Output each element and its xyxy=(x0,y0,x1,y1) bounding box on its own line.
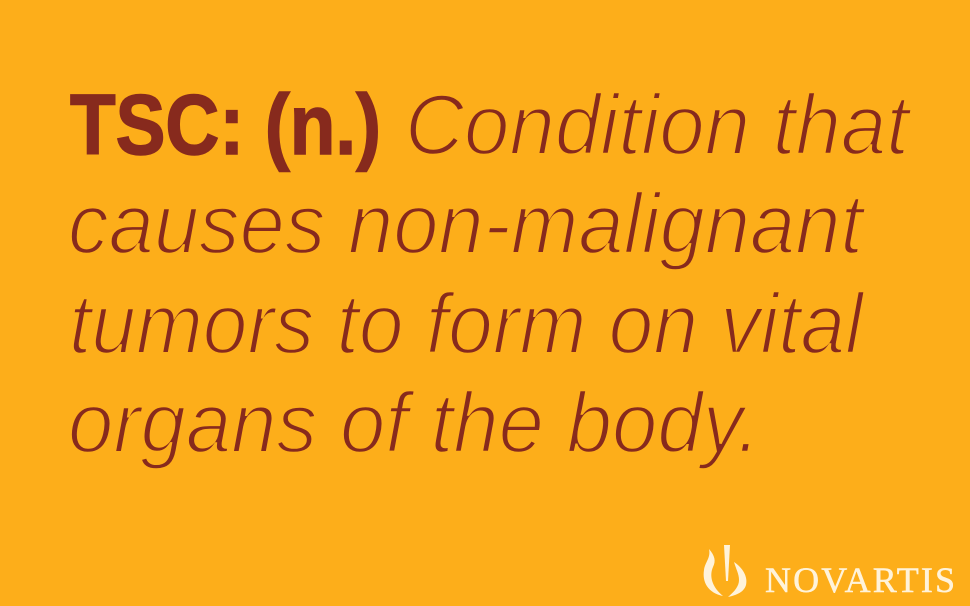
logo: Novartis xyxy=(704,545,955,600)
icon: Novartis flame xyxy=(704,545,746,597)
text line 1: Condition that xyxy=(405,78,912,173)
heading: definition text xyxy=(68,78,912,471)
wordmark: NOVARTIS: NOVARTIS xyxy=(765,560,955,600)
text line 3: tumors to form on vital xyxy=(69,277,865,372)
text line 2: causes non-malignant xyxy=(68,177,866,272)
text line 4: organs of the body. xyxy=(68,376,760,471)
term: TSC (n.): TSC: (n.) xyxy=(70,78,381,173)
